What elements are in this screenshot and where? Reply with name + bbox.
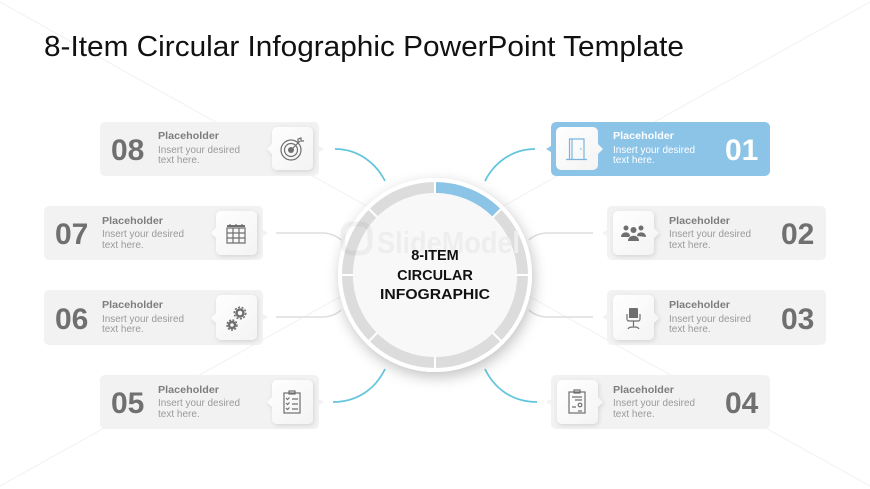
connector: item 03	[529, 310, 593, 317]
card 06: Insert your desired	[102, 314, 184, 325]
watermark logo	[343, 224, 370, 253]
card 05: 05	[111, 387, 144, 420]
card 08	[100, 122, 324, 176]
connector: item 04	[485, 369, 537, 402]
card 02	[602, 206, 826, 260]
card 04: 04	[725, 387, 759, 420]
card 06: 06	[55, 303, 88, 336]
card 07: Insert your desired	[102, 229, 184, 240]
card 01: text here.	[613, 155, 655, 166]
card 08: Placeholder	[158, 130, 219, 142]
card 03: 03	[781, 303, 814, 336]
card 07: Placeholder	[102, 215, 163, 227]
connector: item 02	[529, 233, 593, 240]
ring segments	[340, 180, 530, 370]
icon: certificate clipboard	[569, 390, 585, 413]
center label: CIRCULAR	[397, 268, 473, 284]
card 05: Insert your desired	[158, 398, 240, 409]
watermark: SlideModel	[377, 225, 520, 260]
center label: 8-ITEM	[411, 248, 459, 264]
card 02: Insert your desired	[669, 229, 751, 240]
card 02: text here.	[669, 240, 711, 251]
card 07	[44, 206, 268, 260]
card 07: 07	[55, 218, 88, 251]
title: 8-Item Circular Infographic PowerPoint Template	[44, 31, 684, 63]
card 08: Insert your desired	[158, 145, 240, 156]
card 03: text here.	[669, 324, 711, 335]
icon: calendar	[227, 224, 245, 243]
card 04: text here.	[613, 409, 655, 420]
card 04: Insert your desired	[613, 398, 695, 409]
card 07: text here.	[102, 240, 144, 251]
card 01: Insert your desired	[613, 145, 695, 156]
icon: checklist	[284, 391, 300, 413]
card 01	[546, 122, 770, 176]
connector: item 05	[333, 369, 385, 402]
connector: item 07	[276, 233, 341, 240]
card 03	[602, 290, 826, 345]
card 04: Placeholder	[613, 384, 674, 396]
icon: gears	[227, 307, 246, 330]
card 03: Placeholder	[669, 299, 730, 311]
card 02: 02	[781, 218, 814, 251]
icon: target	[281, 138, 304, 160]
card 04	[546, 375, 770, 429]
center label	[380, 248, 491, 303]
card 06: Placeholder	[102, 299, 163, 311]
connector: item 08	[335, 149, 385, 181]
central circle	[338, 178, 532, 372]
icon: door	[566, 139, 587, 160]
card 06: text here.	[102, 324, 144, 335]
connector: item 01	[485, 149, 535, 181]
card 08: 08	[111, 134, 144, 167]
card 03: Insert your desired	[669, 314, 751, 325]
card 05	[100, 375, 324, 429]
card 02: Placeholder	[669, 215, 730, 227]
icon: team	[621, 226, 646, 241]
card 01: Placeholder	[613, 130, 674, 142]
connector: item 06	[276, 310, 341, 317]
center label: INFOGRAPHIC	[380, 287, 491, 303]
card 08: text here.	[158, 155, 200, 166]
card 06	[44, 290, 268, 345]
card 01: 01	[725, 134, 758, 167]
card 05: Placeholder	[158, 384, 219, 396]
card 05: text here.	[158, 409, 200, 420]
icon: office chair	[627, 308, 640, 329]
